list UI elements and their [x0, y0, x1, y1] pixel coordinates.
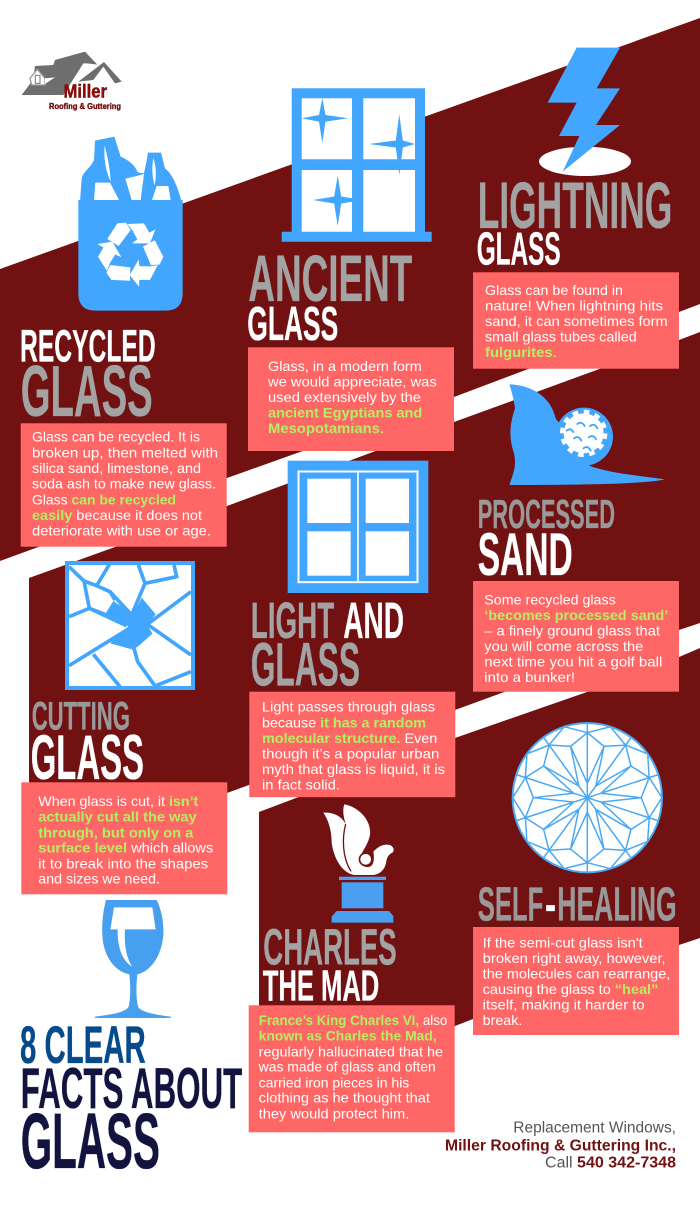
footer: contact text: Miller Roofing & Guttering Inc., — [445, 1137, 676, 1154]
panel: cutting glass text: and sizes we need. — [38, 872, 160, 887]
panel: recycled glass text: easily because it does not — [32, 508, 202, 523]
panel: lightning glass text: Glass can be found in — [485, 283, 623, 298]
icon: golf ball in sand bunker — [509, 384, 665, 485]
heading: Self-Healing: - — [545, 877, 556, 931]
heading: Lightning Glass — [477, 169, 672, 275]
panel: recycled glass text: Glass can be recycled. It is — [32, 430, 200, 445]
panel: Charles the Mad text: clothing as he thought that — [259, 1091, 430, 1106]
panel: light and glass text: myth that glass is liquid, it is — [262, 762, 445, 777]
panel: Charles the Mad text: known as Charles the Mad, — [259, 1029, 437, 1044]
panel: self-healing text: the molecules can rearrange, — [483, 967, 670, 982]
panel: recycled glass text — [21, 423, 227, 547]
panel: self-healing text: itself, making it harder to — [483, 998, 645, 1013]
heading: Recycled Glass — [20, 320, 156, 432]
heading: Processed Sand: SAND — [478, 520, 573, 588]
heading: Recycled Glass: RECYCLED — [20, 320, 156, 371]
panel: light and glass text: Light passes through glass — [262, 700, 435, 715]
icon: torch flame on pedestal — [323, 804, 394, 923]
panel: processed sand text — [473, 581, 679, 692]
panel: ancient glass text: used extensively by the — [268, 390, 421, 405]
icon: diamond — [504, 715, 670, 881]
panel: ancient glass text: ancient Egyptians and — [268, 406, 422, 420]
heading: Cutting Glass — [31, 695, 144, 793]
panel: self-healing text: If the semi-cut glass isn't — [483, 935, 643, 950]
panel: lightning glass text: sand, it can sometimes form — [485, 314, 668, 329]
panel: self-healing text — [473, 927, 679, 1035]
icon: recycle arrows — [92, 223, 169, 290]
heading: Lightning Glass: GLASS — [477, 223, 561, 275]
icon: recycling bin with bottles — [78, 137, 183, 311]
panel: processed sand text: into a bunker! — [484, 670, 575, 685]
panel: light and glass text — [249, 692, 455, 797]
heading: Light and Glass — [251, 592, 404, 700]
panel: processed sand text: you will come across the — [484, 639, 643, 654]
heading: Recycled Glass: GLASS — [21, 352, 153, 432]
footer: contact text — [445, 1120, 676, 1172]
panel: processed sand text: Some recycled glass — [484, 592, 616, 607]
panel: Charles the Mad text — [249, 1005, 455, 1132]
logo: Miller Roofing & Guttering — [22, 52, 122, 111]
heading: Ancient Glass: GLASS — [247, 297, 338, 351]
panel: cutting glass text: through, but only on a — [38, 825, 194, 840]
panel: ancient glass text — [248, 347, 454, 451]
heading: Self-Healing — [478, 877, 677, 931]
icon: window with sparkles — [282, 88, 432, 242]
title: 8 Clear Facts About Glass: FACTS ABOUT — [21, 1057, 242, 1121]
heading: Light and Glass: AND — [343, 592, 404, 649]
panel: Charles the Mad text: France’s King Charles VI, also — [259, 1013, 447, 1028]
panel: lightning glass text: small glass tubes called — [485, 329, 637, 344]
heading: Self-Healing: SELF — [478, 877, 543, 931]
panel: self-healing text: break. — [483, 1013, 522, 1028]
panel: cutting glass text: surface level which allows — [38, 841, 214, 856]
title: 8 Clear Facts About Glass: 8 CLEAR — [20, 1016, 146, 1075]
panel: light and glass text: because it has a random — [262, 715, 426, 730]
heading: Charles the Mad: CHARLES — [263, 919, 397, 976]
heading: Cutting Glass: CUTTING — [32, 695, 130, 739]
panel: self-healing text: causing the glass to “heal” — [483, 982, 658, 997]
heading: Processed Sand — [478, 491, 615, 588]
panel: ancient glass text: Glass, in a modern form — [268, 359, 422, 374]
panel: recycled glass text: Glass can be recycled — [32, 492, 176, 507]
heading: Cutting Glass: GLASS — [31, 723, 144, 793]
heading: Charles the Mad — [263, 919, 397, 1010]
panel: lightning glass text — [473, 272, 679, 369]
panel: processed sand text: – a finely ground glass that — [484, 624, 660, 639]
panel: recycled glass text: broken up, then melted with — [32, 445, 218, 460]
heading: Ancient Glass — [247, 242, 412, 351]
panel: ancient glass text: we would appreciate, was — [267, 374, 437, 390]
panel: cutting glass text: it to break into the shapes — [38, 856, 208, 871]
panel: cutting glass text: actually cut all the way — [38, 810, 197, 825]
icon: cracked glass pane — [65, 561, 195, 690]
panel: processed sand text: ‘becomes processed sand’ — [484, 608, 668, 623]
panel: cutting glass text — [21, 782, 227, 894]
heading: Ancient Glass: ANCIENT — [248, 242, 412, 316]
title: 8 Clear Facts About Glass: GLASS — [21, 1097, 160, 1185]
footer: contact text: Replacement Windows, — [513, 1120, 676, 1137]
panel: processed sand text: next time you hit a golf ball — [484, 655, 662, 670]
icon: lightning striking sand — [539, 48, 631, 176]
icon: window — [288, 461, 428, 593]
title: 8 Clear Facts About Glass — [20, 1016, 242, 1185]
panel: cutting glass text: When glass is cut, it isn’t — [38, 794, 199, 809]
panel: ancient glass text: Mesopotamians. — [268, 421, 384, 436]
heading: Charles the Mad: THE MAD — [263, 962, 379, 1010]
icon: wine glass — [95, 900, 171, 1018]
heading: Light and Glass: LIGHT — [251, 592, 334, 649]
logo: Miller Roofing & Guttering: Roofing & Guttering — [49, 101, 121, 111]
panel: Charles the Mad text: they would protect him. — [259, 1106, 409, 1121]
footer: contact text: Call 540 342-7348 — [545, 1155, 676, 1172]
panel: recycled glass text: deteriorate with use or age. — [32, 523, 211, 538]
panel: light and glass text: molecular structure. Even — [262, 731, 437, 746]
panel: lightning glass text: fulgurites. — [485, 345, 557, 360]
panel: Charles the Mad text: was made of glass and often — [258, 1060, 436, 1075]
heading: Light and Glass: GLASS — [251, 631, 360, 700]
panel: Charles the Mad text: regularly hallucinated that he — [259, 1044, 443, 1059]
panel: light and glass text: though it’s a popular urban — [262, 746, 439, 761]
panel: recycled glass text: silica sand, limestone, and — [32, 461, 201, 476]
panel: recycled glass text: soda ash to make new glass. — [32, 477, 216, 492]
panel: Charles the Mad text: carried iron pieces in his — [259, 1075, 410, 1090]
panel: light and glass text: in fact solid. — [262, 777, 340, 792]
logo: Miller Roofing & Guttering: Miller — [64, 82, 107, 102]
panel: lightning glass text: nature! When lightning hits — [485, 298, 663, 313]
panel: self-healing text: broken right away, however, — [483, 951, 666, 966]
